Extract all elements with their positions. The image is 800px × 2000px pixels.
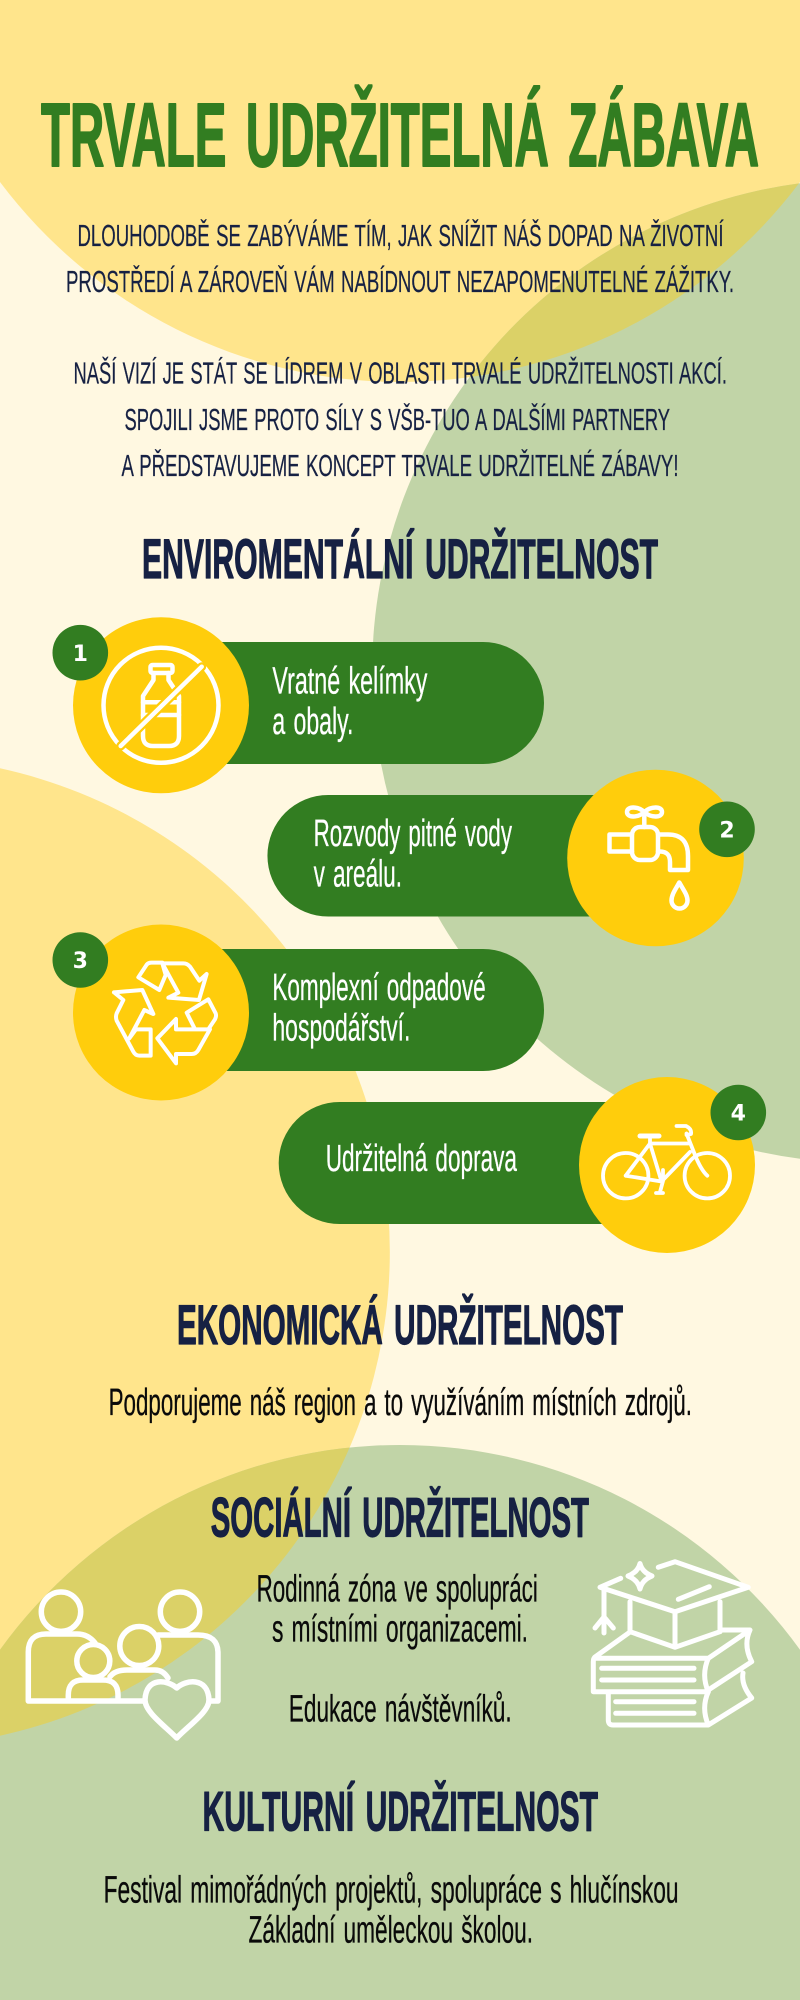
icon: graduation cap and books — [593, 1562, 752, 1725]
item 4: Udržitelná doprava — [326, 1138, 518, 1180]
item 3: Komplexní odpadové — [272, 967, 486, 1009]
item 3: hospodářství. — [272, 1008, 410, 1050]
text: cultural: Základní uměleckou školou. — [248, 1910, 533, 1952]
text: cultural — [104, 1870, 679, 1952]
text: social — [257, 1569, 538, 1731]
item 3: 3 — [73, 949, 88, 974]
item 1: a obaly. — [272, 701, 353, 743]
item 2: 2 — [719, 818, 735, 844]
icon: family — [28, 1592, 218, 1738]
item 2: Rozvody pitné vody — [314, 813, 512, 855]
icon: bicycle — [603, 1126, 730, 1198]
item 3 — [53, 924, 544, 1100]
text: social: Edukace návštěvníků. — [289, 1689, 512, 1731]
item 1 — [53, 617, 544, 793]
item 1: 1 — [73, 642, 88, 667]
item 2 — [267, 770, 755, 946]
icon: recycling — [114, 963, 216, 1063]
icon: water tap — [610, 808, 688, 908]
item 4: 4 — [731, 1102, 746, 1126]
intro text — [66, 218, 734, 483]
item 4 — [279, 1077, 766, 1253]
icon: no bottle — [104, 648, 218, 763]
text: social: s místními organizacemi. — [272, 1609, 528, 1651]
item 2: v areálu. — [314, 854, 402, 896]
text: social: Rodinná zóna ve spolupráci — [257, 1569, 538, 1611]
item 1: Vratné kelímky — [272, 660, 427, 702]
